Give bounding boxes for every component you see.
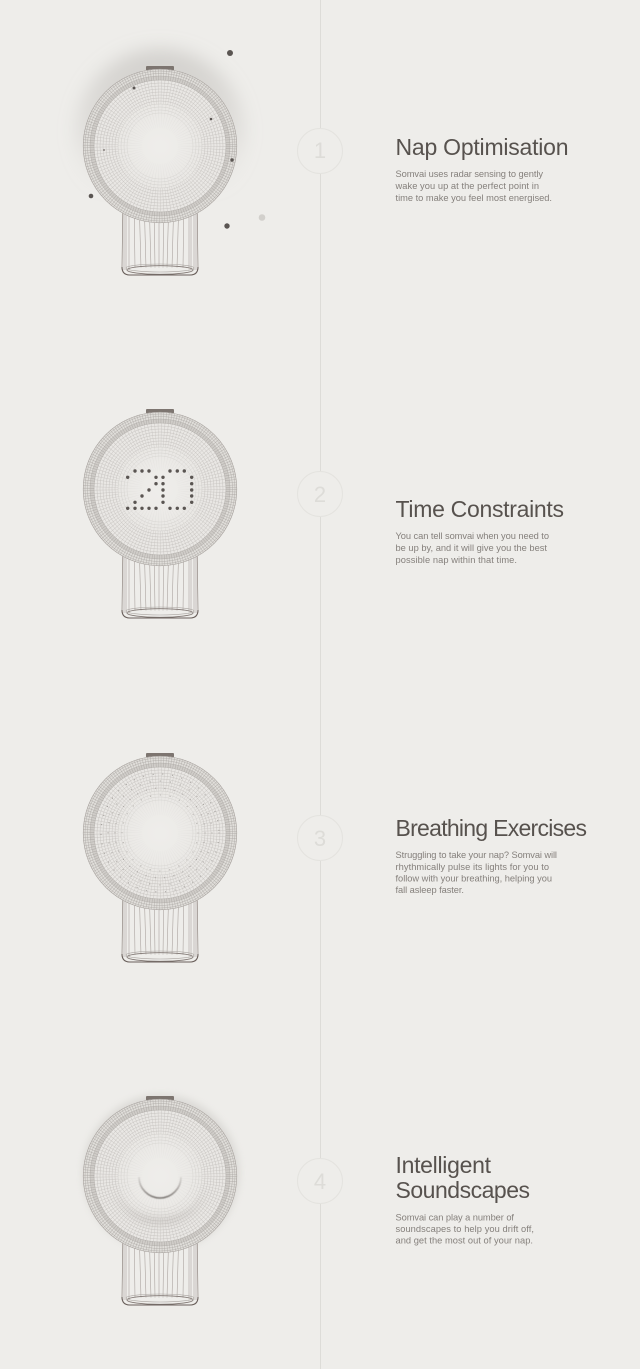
step 1 number badge [298, 128, 342, 174]
step 2 body text: You can tell somvai when you need to [396, 531, 549, 541]
step 4 number badge: 4 [314, 1169, 326, 1194]
step 4 body text: and get the most out of your nap. [396, 1236, 533, 1246]
step 3 body text: rhythmically pulse its lights for you to [396, 862, 549, 872]
step 1 body text: time to make you feel most energised. [396, 193, 552, 203]
step 1 heading: Nap Optimisation [396, 134, 568, 160]
step 1 number badge: 1 [314, 138, 326, 163]
sound ripple [113, 1182, 207, 1224]
device wireframe 2 [83, 409, 237, 618]
device wireframe 1 [83, 66, 237, 275]
step 3 body text: fall asleep faster. [396, 885, 464, 895]
device wireframe 4 [83, 1096, 237, 1305]
step 3 number badge: 3 [314, 826, 326, 851]
step 2 number badge [298, 472, 342, 516]
step 4 heading: Soundscapes [396, 1177, 530, 1203]
timeline vertical line [320, 0, 322, 1369]
step 4 heading [396, 1152, 530, 1203]
step 2 number badge: 2 [314, 482, 326, 507]
sound arc [139, 1177, 181, 1198]
step 1: nap optimisation device [76, 49, 265, 275]
dot matrix display: 20 [126, 469, 193, 510]
radar particles [89, 50, 265, 229]
step 3 heading: Breathing Exercises [396, 815, 587, 841]
step 1 body text: Somvai uses radar sensing to gently [396, 169, 543, 179]
step 1 body text: wake you up at the perfect point in [394, 181, 539, 191]
step 2: time constraints device [83, 409, 237, 618]
step 3: breathing exercises device [83, 753, 237, 962]
step 4 heading: Intelligent [396, 1152, 492, 1178]
step 2 heading: Time Constraints [396, 496, 564, 522]
glow behind device [76, 49, 244, 217]
device wireframe 3 [83, 753, 237, 962]
pulsing light dots [101, 774, 219, 892]
step 4 body text: Somvai can play a number of [396, 1212, 514, 1222]
step 4 body text: soundscapes to help you drift off, [396, 1224, 534, 1234]
step 4 body text [396, 1212, 534, 1246]
step 2 body text: possible nap within that time. [396, 555, 517, 565]
step 3 body text: Struggling to take your nap? Somvai will [396, 850, 557, 860]
step 4 number badge [298, 1158, 342, 1204]
step 2 body text: be up by, and it will give you the best [396, 543, 547, 553]
step 2 body text [396, 531, 549, 565]
outer shadow [83, 1095, 239, 1251]
step 1 body text [394, 169, 552, 203]
step 3 body text: follow with your breathing, helping you [396, 874, 552, 884]
step 3 body text [396, 850, 557, 895]
step 4: intelligent soundscapes device [83, 1095, 239, 1305]
step 3 number badge [298, 816, 342, 860]
